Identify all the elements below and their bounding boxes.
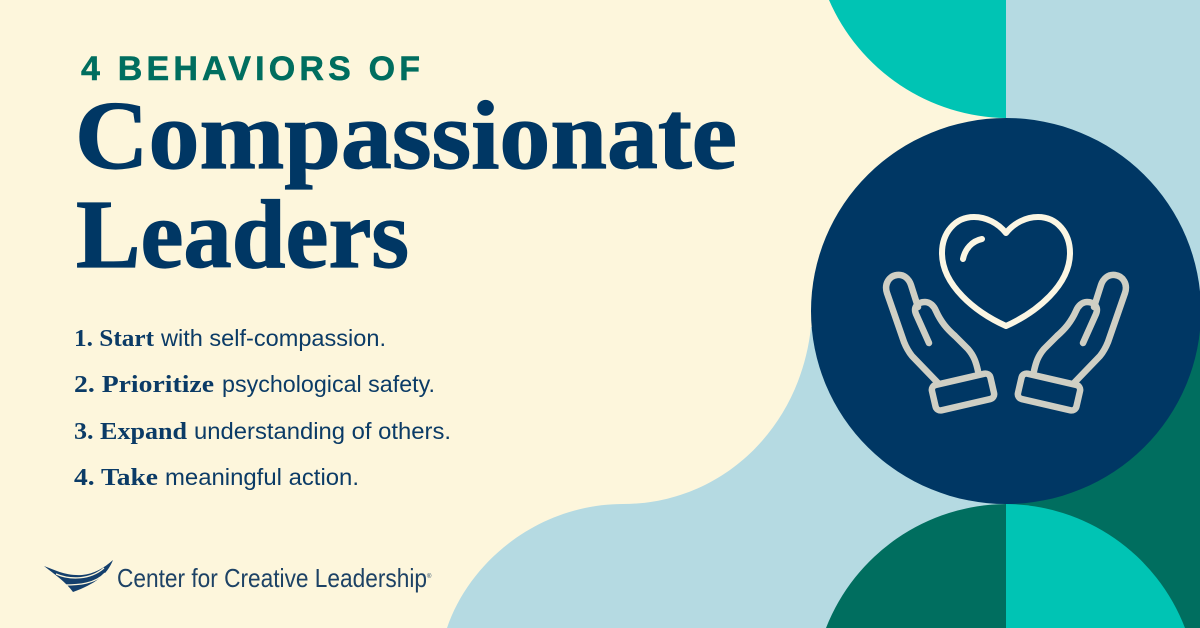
behavior 4: meaningful action. xyxy=(165,464,359,490)
dark green lower right panel xyxy=(1006,311,1200,628)
title xyxy=(75,82,737,288)
icon: heart held by two hands xyxy=(886,217,1126,411)
logo: Center for Creative Leadership xyxy=(44,560,432,593)
icon: left hand xyxy=(886,275,995,411)
title: Compassionate xyxy=(75,82,737,189)
title: Leaders xyxy=(76,181,409,288)
behavior 2 xyxy=(74,371,435,398)
light blue wave shape xyxy=(447,311,1006,628)
eyebrow heading: 4 BEHAVIORS OF xyxy=(81,50,420,88)
icon: logo wing xyxy=(44,560,113,592)
behavior 4: 4. Take xyxy=(74,465,158,491)
behavior 1: 1. Start xyxy=(74,326,154,352)
behavior 1 xyxy=(74,325,386,352)
light blue upper right panel xyxy=(1006,0,1200,314)
bottom half circle: green and teal xyxy=(826,504,1185,628)
behavior 3: understanding of others. xyxy=(194,418,451,444)
navy circle xyxy=(811,118,1200,504)
logo wordmark: Center for Creative Leadership xyxy=(117,563,427,593)
list of four behaviors xyxy=(74,325,451,491)
behavior 1: with self-compassion. xyxy=(160,325,386,351)
icon: right hand xyxy=(1017,275,1126,411)
registered mark: ® xyxy=(427,573,432,580)
teal top quarter circle xyxy=(829,0,1006,118)
behavior 2: 2. Prioritize xyxy=(74,372,214,398)
behavior 3 xyxy=(74,418,451,445)
behavior 3: 3. Expand xyxy=(74,419,188,445)
behavior 2: psychological safety. xyxy=(222,371,435,397)
icon: heart xyxy=(942,217,1070,326)
behavior 4 xyxy=(74,464,359,491)
